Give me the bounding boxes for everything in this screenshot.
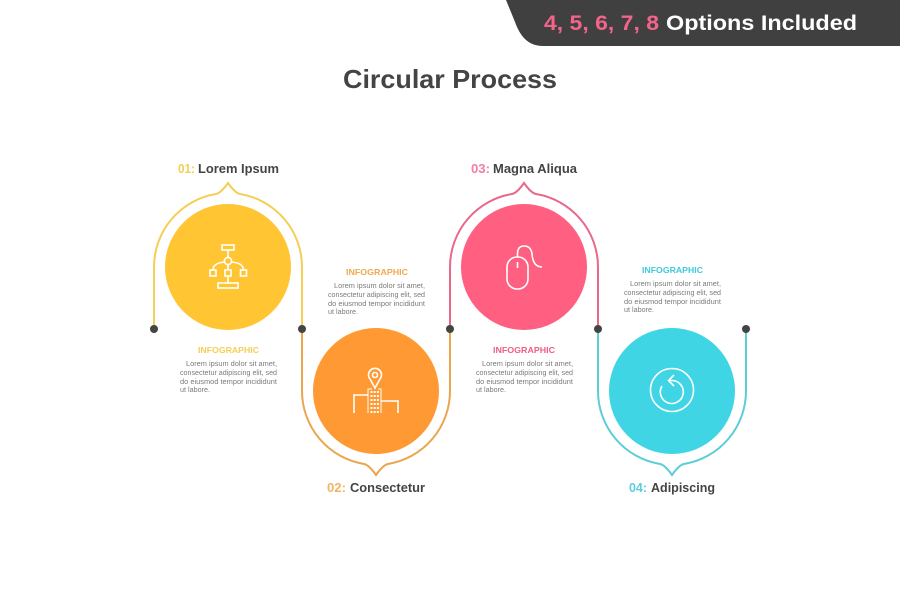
- step 1 text: ut labore.: [180, 387, 210, 394]
- step 2 circle: [313, 328, 439, 454]
- step 2 text: [328, 267, 425, 316]
- icon: refresh: [650, 368, 694, 412]
- step 4 label: 04:: [629, 480, 647, 495]
- step 2 text: Lorem ipsum dolor sit amet,: [334, 283, 425, 290]
- step 4 label: Adipiscing: [651, 480, 715, 495]
- step 3 text: do eiusmod tempor incididunt: [476, 379, 573, 386]
- step 3 label: Magna Aliqua: [493, 161, 578, 176]
- step 3 text: [476, 345, 573, 394]
- top banner: [506, 0, 900, 46]
- step 2 text: consectetur adipiscing elit, sed: [328, 292, 425, 299]
- step 3 circle: [461, 204, 587, 330]
- step 4 text: ut labore.: [624, 307, 654, 314]
- step 3 text: Lorem ipsum dolor sit amet,: [482, 361, 573, 368]
- step 4 outline: [598, 329, 746, 475]
- step 3 label: 03:: [471, 161, 490, 176]
- step 3 text: consectetur adipiscing elit, sed: [476, 370, 573, 377]
- step 4 text: consectetur adipiscing elit, sed: [624, 290, 721, 297]
- step 2 text: ut labore.: [328, 309, 358, 316]
- step 1 outline: [154, 183, 302, 329]
- step 4 text: INFOGRAPHIC: [642, 265, 703, 275]
- step 1 text: consectetur adipiscing elit, sed: [180, 370, 277, 377]
- title: Circular Process: [343, 64, 557, 94]
- step 1 label: Lorem Ipsum: [198, 161, 279, 176]
- step 2 label: 02:: [327, 480, 346, 495]
- step 2 text: do eiusmod tempor incididunt: [328, 301, 425, 308]
- connector dots: [150, 325, 750, 333]
- step 4: Adipiscing: [598, 265, 746, 495]
- step 1 circle: [165, 204, 291, 330]
- step 1: Lorem Ipsum: [154, 161, 302, 394]
- step 4 circle: [609, 328, 735, 454]
- icon: mouse: [507, 246, 542, 289]
- step 2 outline: [302, 329, 450, 475]
- icon: flowchart: [210, 245, 246, 288]
- step 2: Consectetur: [302, 267, 450, 495]
- step 1 text: do eiusmod tempor incididunt: [180, 379, 277, 386]
- step 4 text: Lorem ipsum dolor sit amet,: [630, 281, 721, 288]
- step 1 text: [180, 345, 277, 394]
- step 3 text: INFOGRAPHIC: [493, 345, 555, 355]
- step 1 text: INFOGRAPHIC: [198, 345, 259, 355]
- step 2 text: INFOGRAPHIC: [346, 267, 408, 277]
- step 4 text: do eiusmod tempor incididunt: [624, 299, 721, 306]
- top banner: Options Included: [666, 12, 857, 35]
- icon: building with pin: [354, 368, 398, 413]
- step 1 text: Lorem ipsum dolor sit amet,: [186, 361, 277, 368]
- top banner: 4, 5, 6, 7, 8: [544, 12, 659, 35]
- step 3 text: ut labore.: [476, 387, 506, 394]
- step 1 label: 01:: [178, 161, 195, 176]
- step 3 outline: [450, 183, 598, 329]
- step 3: Magna Aliqua: [450, 161, 598, 394]
- step 2 label: Consectetur: [350, 480, 425, 495]
- step 4 text: [624, 265, 721, 314]
